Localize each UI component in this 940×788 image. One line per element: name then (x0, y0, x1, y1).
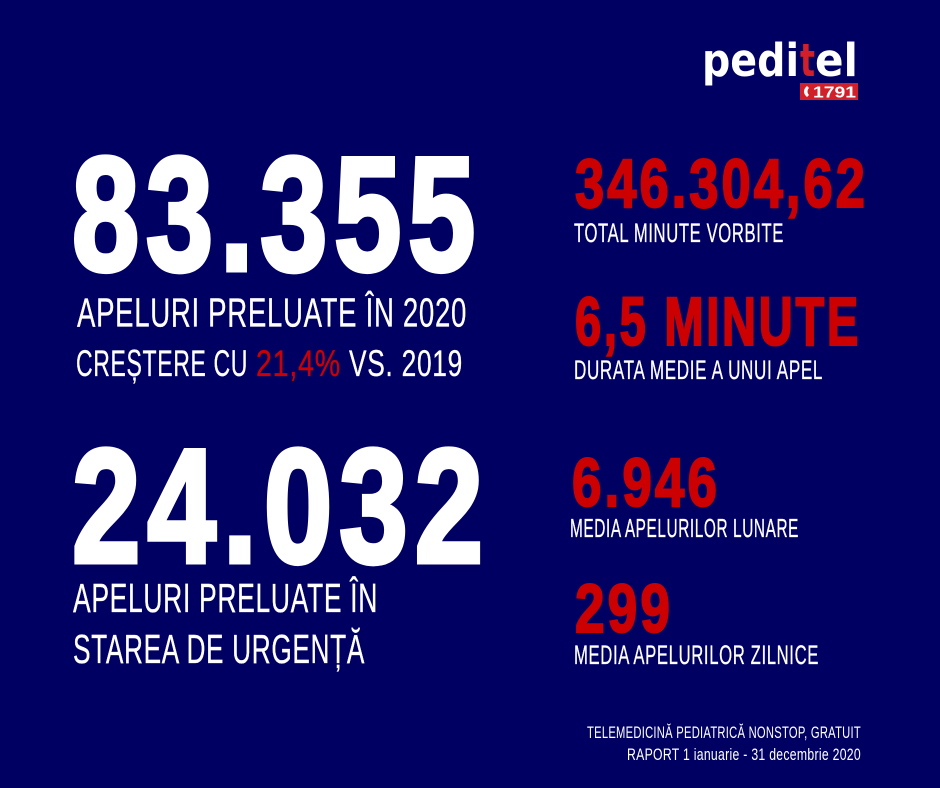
stat: total minutes: TOTAL MINUTE VORBITE (574, 218, 784, 248)
stat: daily average: 299 (575, 570, 673, 647)
stat: monthly average: 6.946 (572, 444, 720, 521)
stat: calls in state of emergency (72, 416, 490, 672)
stat: total calls 2020 (72, 124, 482, 384)
stat: average call duration (574, 283, 861, 385)
stat: total calls 2020: VS. 2019 (349, 343, 463, 384)
logo: peditel 1791: 1791 (813, 84, 856, 102)
stat: calls in state of emergency: 24.032 (72, 416, 490, 597)
stat: total calls 2020: 83.355 (72, 124, 482, 305)
logo: peditel 1791: el (815, 34, 858, 87)
logo: peditel 1791: t (800, 34, 815, 87)
stat: total minutes (574, 145, 868, 248)
stat: calls in state of emergency: APELURI PRELUATE ÎN (73, 575, 378, 621)
logo: peditel 1791: pedi (702, 34, 799, 87)
stat: total calls 2020: APELURI PRELUATE ÎN 2020 (77, 290, 467, 336)
stat: daily average (574, 570, 819, 670)
footer note: RAPORT 1 ianuarie - 31 decembrie 2020 (627, 746, 861, 764)
stat: calls in state of emergency: STAREA DE URGENȚĂ (73, 626, 365, 672)
logo: peditel 1791 (702, 34, 858, 102)
footer note (587, 723, 861, 764)
stat: total calls 2020: CREȘTERE CU (76, 343, 248, 384)
stat: monthly average (570, 444, 799, 543)
stat: total calls 2020: 21,4% (256, 343, 341, 384)
